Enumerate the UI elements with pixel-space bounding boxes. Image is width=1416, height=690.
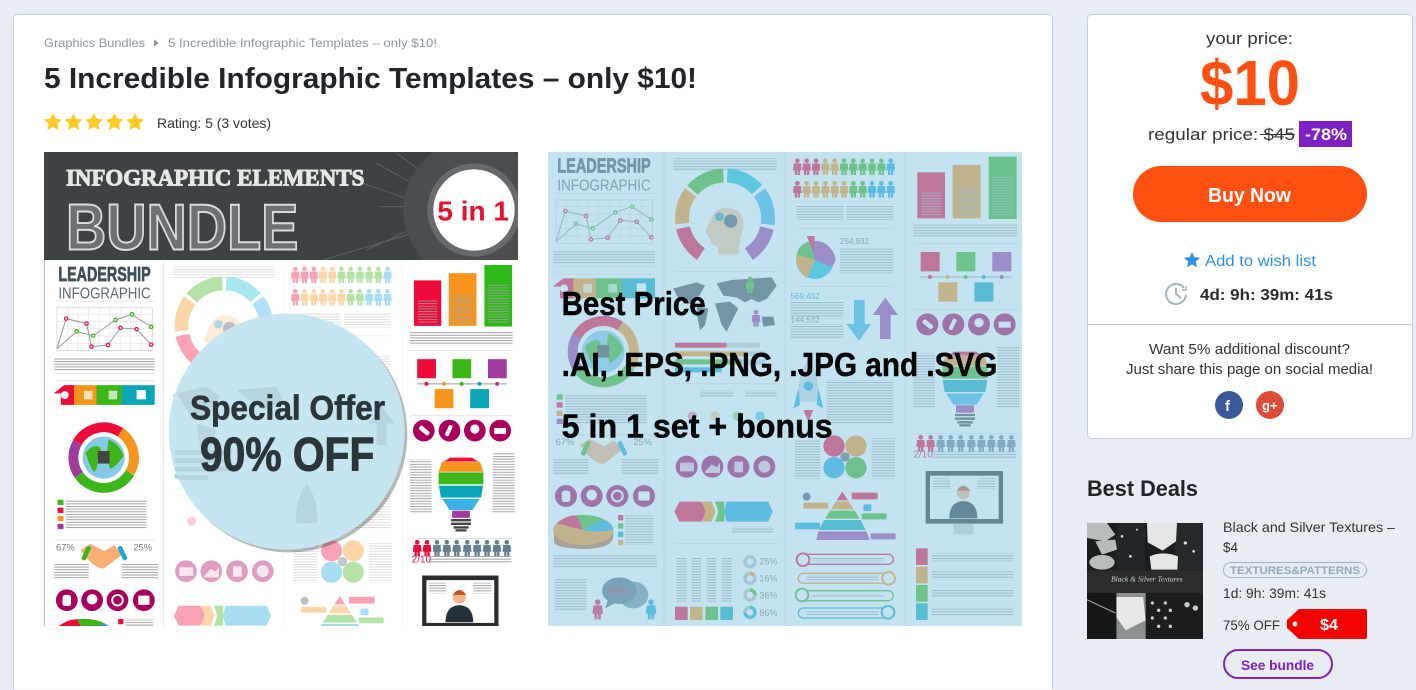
breadcrumb bbox=[44, 36, 437, 50]
deal thumbnail bbox=[1087, 523, 1203, 639]
overlay text bbox=[562, 286, 997, 445]
deal details bbox=[1223, 519, 1395, 633]
deal thumbnail: Black & Silver Textures bbox=[1111, 575, 1183, 584]
left image: bundle with special offer: 2/10 bbox=[412, 555, 432, 566]
left image: bundle with special offer: 67% bbox=[56, 542, 75, 552]
special offer circle: Special Offer bbox=[190, 389, 385, 427]
share text: Want 5% additional discount? bbox=[1149, 342, 1350, 358]
blue tint bbox=[548, 152, 1022, 626]
see bundle button bbox=[1224, 650, 1332, 678]
right image: best price: 16% bbox=[759, 574, 777, 584]
discount badge: -78% bbox=[1305, 125, 1347, 144]
right image: best price: INFOGRAPHIC bbox=[557, 178, 651, 195]
countdown: 4d: 9h: 39m: 41s bbox=[1200, 287, 1333, 304]
special offer circle: 90% OFF bbox=[200, 429, 374, 482]
breadcrumb: 5 Incredible Infographic Templates – only $10! bbox=[168, 36, 437, 50]
deal details: 1d: 9h: 39m: 41s bbox=[1223, 585, 1326, 601]
right image: best price: 36% bbox=[759, 591, 777, 601]
discount badge bbox=[1299, 121, 1352, 147]
right image: best price: 25% bbox=[759, 556, 777, 566]
infographic sheet bbox=[553, 152, 1019, 550]
price tag: $4 bbox=[1320, 617, 1338, 634]
right image: best price: 144,532 bbox=[791, 316, 820, 325]
right image: best price: 569,432 bbox=[791, 292, 820, 301]
price: $10 bbox=[1200, 47, 1300, 119]
your price label: your price: bbox=[1206, 29, 1293, 48]
header band bbox=[44, 152, 518, 264]
icon: facebook bbox=[1215, 391, 1243, 419]
right image: best price: 25% bbox=[633, 437, 652, 447]
deal details: 75% OFF bbox=[1223, 617, 1280, 633]
right image: best price: LEADERSHIP bbox=[557, 155, 651, 178]
regular price: regular price: $45 bbox=[1148, 125, 1295, 144]
right image: best price bbox=[548, 152, 1022, 626]
category tag: TEXTURES&PATTERNS bbox=[1230, 565, 1360, 577]
title: 5 Incredible Infographic Templates – only $10! bbox=[44, 63, 697, 95]
left image: bundle with special offer: INFOGRAPHIC bbox=[58, 286, 151, 303]
right image: best price: 2/10 bbox=[913, 449, 933, 460]
left image: bundle with special offer: 25% bbox=[133, 542, 152, 552]
deal details: Black and Silver Textures – bbox=[1223, 519, 1395, 535]
overlay text: Best Price bbox=[562, 286, 706, 323]
breadcrumb: Graphics Bundles bbox=[44, 36, 145, 50]
wish list: Add to wish list bbox=[1205, 253, 1317, 270]
header band: 5 in 1 bbox=[437, 196, 509, 227]
main card bbox=[14, 14, 1052, 690]
icon: google plus: g+ bbox=[1262, 398, 1278, 413]
share text bbox=[1126, 342, 1373, 378]
see bundle button: See bundle bbox=[1241, 657, 1314, 673]
right image: best price: 86% bbox=[759, 608, 777, 618]
icon: facebook: f bbox=[1225, 398, 1231, 415]
category tag bbox=[1224, 562, 1366, 578]
header band: BUNDLE bbox=[66, 191, 298, 264]
right image: best price: 95% bbox=[608, 586, 627, 596]
price tag bbox=[1287, 609, 1367, 639]
buy button bbox=[1133, 166, 1367, 222]
right image: best price: 254,932 bbox=[840, 237, 869, 246]
share text: Just share this page on social media! bbox=[1126, 362, 1373, 378]
overlay text: 5 in 1 set + bonus bbox=[562, 408, 833, 445]
buy button: Buy Now bbox=[1208, 185, 1291, 207]
left image: bundle with special offer bbox=[44, 152, 518, 626]
rating text: Rating: 5 (3 votes) bbox=[157, 115, 271, 131]
panel: price bbox=[1088, 14, 1412, 438]
right image: best price: 67% bbox=[556, 437, 574, 447]
special offer circle bbox=[169, 314, 407, 552]
infographic sheet bbox=[54, 260, 515, 654]
header band: INFOGRAPHIC ELEMENTS bbox=[66, 166, 364, 192]
best deals heading: Best Deals bbox=[1087, 476, 1198, 501]
icon: google plus bbox=[1256, 391, 1284, 419]
left image: bundle with special offer: LEADERSHIP bbox=[58, 263, 151, 286]
faded centre bbox=[164, 258, 404, 626]
icon: clock bbox=[1166, 284, 1186, 304]
rating stars bbox=[44, 113, 144, 130]
deal details: $4 bbox=[1223, 539, 1238, 555]
